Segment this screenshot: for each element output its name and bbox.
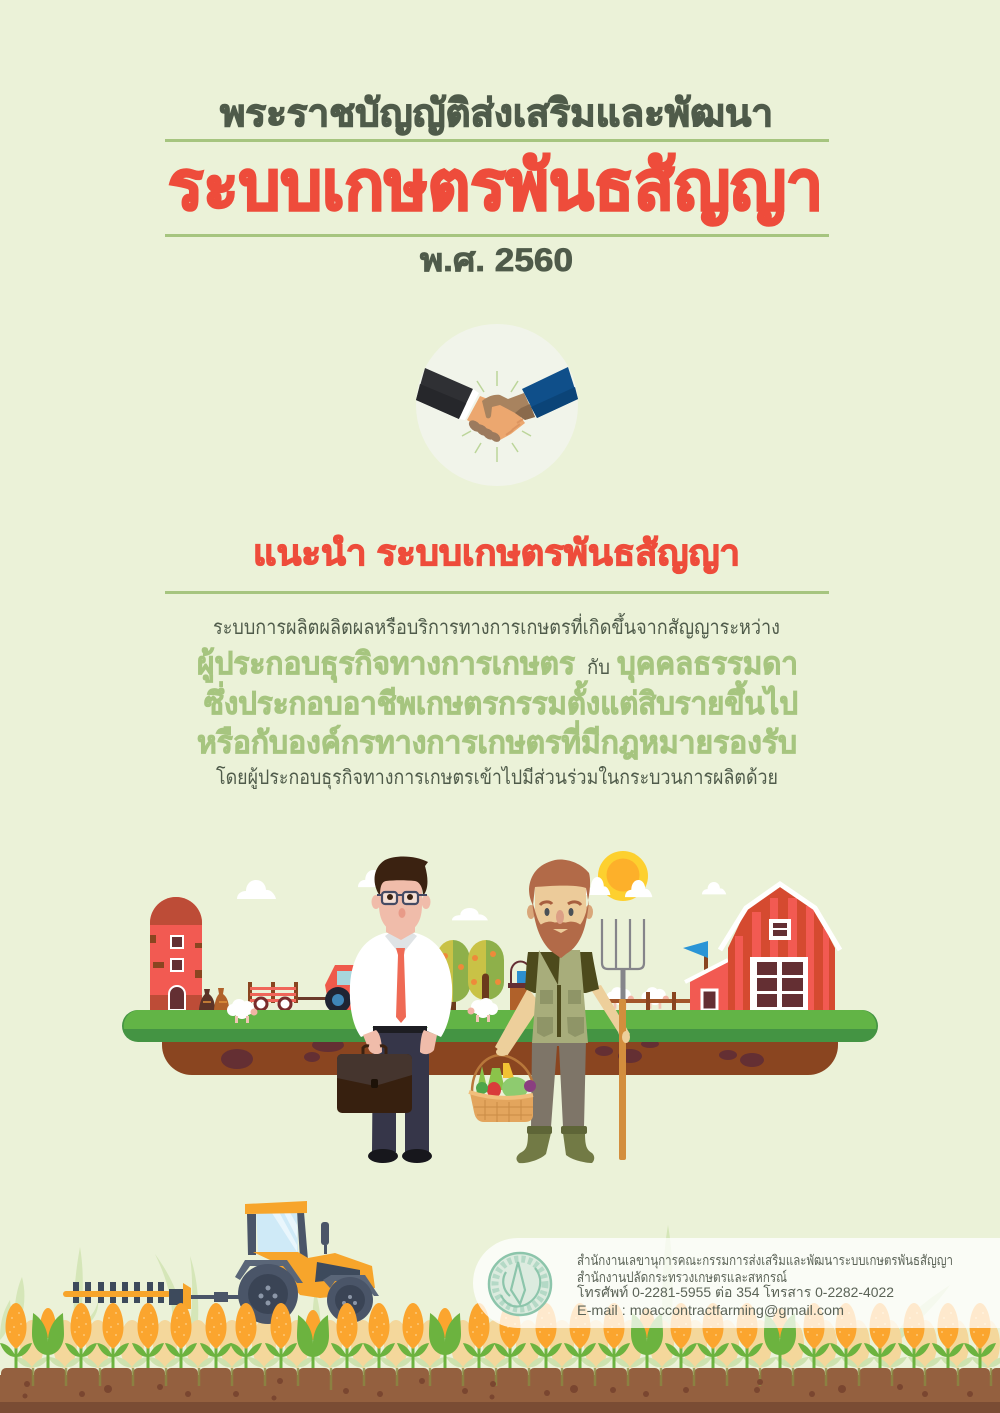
contact text: โทรศัพท์ 0-2281-5955 ต่อ 354 โทรสาร 0-2282-4022 xyxy=(577,1284,894,1300)
briefcase xyxy=(337,1054,412,1113)
sheep on grass xyxy=(227,998,498,1023)
contact text: สำนักงานปลัดกระทรวงเกษตรและสหกรณ์ xyxy=(577,1269,787,1285)
text block: definition: ซึ่งประกอบอาชีพเกษตรกรรมตั้งแต่สิบรายขึ้นไป xyxy=(204,680,798,721)
barn xyxy=(685,884,840,1010)
text block: definition: ระบบการผลิตผลิตผลหรือบริการทางการเกษตรที่เกิดขึ้นจากสัญญาระหว่าง xyxy=(213,613,780,639)
well xyxy=(508,961,532,1010)
text block: definition xyxy=(197,613,798,790)
farmer xyxy=(469,860,644,1163)
trees xyxy=(436,940,504,1010)
panel: contact information xyxy=(473,1238,1000,1328)
pitchfork xyxy=(602,919,644,1160)
businessman xyxy=(337,856,452,1163)
ground island xyxy=(122,1010,878,1075)
text block: definition: โดยผู้ประกอบธุรกิจทางการเกษตรเข้าไปมีส่วนร่วมในกระบวนการผลิตด้วย xyxy=(216,766,778,790)
icon: ministry seal xyxy=(489,1253,551,1315)
text block: definition: บุคคลธรรมดา xyxy=(617,646,798,683)
text block: definition: กับ xyxy=(587,657,610,679)
clouds and sun xyxy=(237,851,726,920)
illustration: farm scene xyxy=(122,851,878,1163)
title: act name: พระราชบัญญัติส่งเสริมและพัฒนา xyxy=(220,93,773,135)
icon: handshake xyxy=(416,324,578,486)
basket of vegetables xyxy=(469,1048,536,1122)
text block: definition: ผู้ประกอบธุรกิจทางการเกษตร xyxy=(197,646,575,683)
contact text: E-mail : moaccontractfarming@gmail.com xyxy=(577,1302,844,1318)
title: year: พ.ศ. 2560 xyxy=(420,242,573,278)
foreground corn row xyxy=(0,1303,996,1370)
background grass and pale corn xyxy=(0,1225,1000,1368)
text block: definition: หรือกับองค์กรทางการเกษตรที่มีกฎหมายรองรับ xyxy=(197,720,797,760)
fence xyxy=(600,987,690,1010)
tractor with harrow xyxy=(63,1201,379,1324)
trailer and tractor xyxy=(248,965,372,1013)
grain sacks xyxy=(199,988,229,1010)
contact text xyxy=(577,1252,953,1318)
soil xyxy=(0,1368,1000,1413)
heading: introduction: แนะนำ ระบบเกษตรพันธสัญญา xyxy=(253,532,740,574)
silo xyxy=(150,897,202,1010)
title: contract farming system: ระบบเกษตรพันธสัญญา xyxy=(168,148,823,226)
flag xyxy=(683,941,708,970)
